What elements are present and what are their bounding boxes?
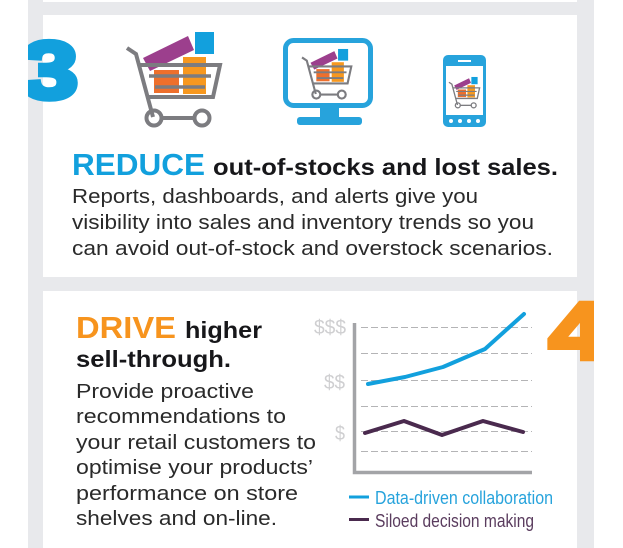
icon: monitor with cart: [286, 40, 370, 125]
chart axes: [354, 323, 532, 472]
line: data-driven collaboration: [368, 314, 524, 384]
heading: drive: higher: [185, 317, 262, 343]
line chart: [314, 314, 532, 472]
text block: reduce description: can avoid out-of-stock and overstock scenarios.: [72, 238, 553, 260]
text block: drive description: [76, 381, 316, 530]
text block: drive description: optimise your products’: [76, 457, 313, 479]
text block: drive description: Provide proactive: [76, 381, 254, 403]
heading: reduce: [72, 147, 558, 182]
text block: reduce description: Reports, dashboards, and alerts give you: [72, 186, 478, 208]
text block: drive description: performance on store: [76, 483, 298, 505]
text block: reduce description: visibility into sales and inventory trends so you: [72, 212, 534, 234]
text block: reduce description: [72, 186, 553, 260]
axis labels: [314, 317, 346, 445]
icon: shopping cart: [127, 32, 220, 126]
number 4: 4: [549, 287, 607, 377]
axis labels: $$$: [314, 317, 346, 339]
heading: drive: DRIVE: [76, 310, 176, 345]
heading: reduce: REDUCE: [72, 147, 205, 182]
panel: reduce: [21, 15, 577, 277]
legend: Data-driven collaboration: [375, 488, 553, 508]
number 3: 3: [21, 26, 78, 116]
text block: drive description: your retail customers to: [76, 432, 316, 454]
heading: drive: sell-through.: [76, 346, 231, 372]
axis labels: $$: [324, 372, 345, 394]
legend: [349, 488, 553, 531]
line: siloed decision making: [365, 421, 523, 435]
icon: phone with cart: [443, 55, 486, 127]
panel: drive: [43, 287, 607, 548]
heading: reduce: out-of-stocks and lost sales.: [213, 154, 558, 180]
axis labels: $: [335, 423, 345, 445]
text block: drive description: recommendations to: [76, 406, 286, 428]
legend: Siloed decision making: [375, 511, 534, 531]
heading: drive: [76, 310, 262, 372]
text block: drive description: shelves and on-line.: [76, 508, 277, 530]
